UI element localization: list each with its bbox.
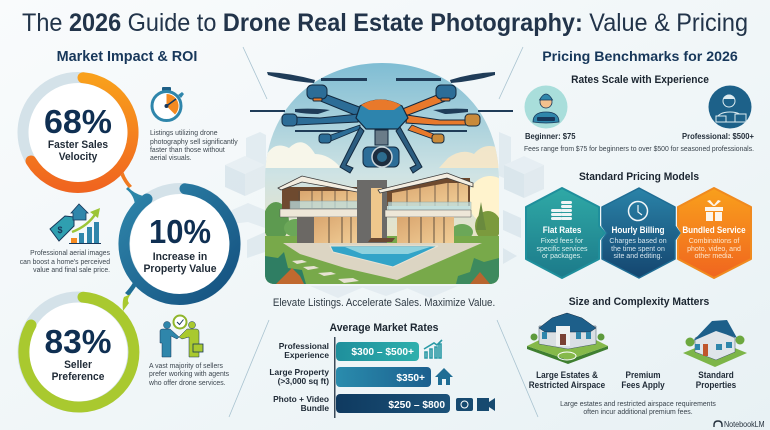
icon: professional pilot: [708, 86, 752, 128]
tagline: Elevate Listings. Accelerate Sales. Maximize Value.: [273, 298, 495, 309]
stat ring: 83 percent: [23, 297, 134, 407]
text: property value note: can boost a home's perceived: [20, 258, 110, 266]
subheading: size and complexity: Size and Complexity Matters: [569, 296, 709, 308]
scene: sky, house and pool: [265, 63, 499, 284]
bar: large property: (>3,000 sq ft): [278, 376, 329, 386]
landing legs: [340, 127, 364, 173]
icon: standard house: [683, 320, 747, 367]
bar: photo and video bundle: $250 – $800: [388, 400, 445, 411]
heading: pricing benchmarks: Pricing Benchmarks for 2026: [542, 49, 738, 65]
card: flat rates: or packages.: [542, 253, 582, 260]
text: property value note: Professional aerial images: [30, 249, 110, 257]
label: standard properties: Properties: [696, 380, 736, 390]
icon: price tag and growth chart: $: [57, 225, 63, 235]
badge: NotebookLM: NotebookLM: [724, 420, 765, 429]
icon: clock: [628, 202, 648, 220]
bar: large property: $350+: [396, 373, 425, 384]
camera: [375, 130, 388, 145]
icon: growth bars: [424, 340, 442, 358]
stepping stones: [292, 260, 359, 283]
label: premium fees: Premium: [626, 370, 661, 380]
card: flat rates: [526, 188, 605, 278]
stat ring: 83 percent: 83%: [44, 323, 112, 360]
bar: photo and video bundle: Bundle: [301, 403, 329, 413]
hero illustration: drone over modern house: [250, 60, 513, 309]
text: fee range: Fees range from $75 for beginners to over $500 for seasoned professionals.: [524, 144, 754, 153]
stat ring: 68 percent: 68%: [44, 103, 112, 140]
title: The 2026 Guide to Drone Real Estate Photography: Value & Pricing: [22, 9, 748, 37]
label: large estates: Restricted Airspace: [529, 380, 605, 390]
card: hourly billing: Charges based on: [609, 238, 667, 245]
icon: large estate: [527, 313, 608, 364]
back arms: [328, 125, 360, 141]
icon: camera: [456, 398, 473, 411]
card: bundled service: Bundled Service: [682, 225, 746, 235]
label: beginner price: Beginner: $75: [525, 132, 576, 141]
drone: [250, 72, 513, 173]
card: flat rates: specific services: [537, 246, 588, 253]
icon: video camera: [477, 398, 495, 411]
text: sales velocity note: photography sell significantly: [150, 138, 238, 146]
label: premium fees: Fees Apply: [621, 380, 665, 390]
connector: rings: [120, 171, 143, 311]
center tower: [357, 180, 387, 244]
icon: gift box: [705, 200, 723, 221]
stat ring: 68 percent: [23, 78, 133, 188]
body: [356, 100, 408, 129]
card: bundled service: [678, 188, 751, 278]
axis: [334, 337, 336, 418]
card: bundled service: photo, video, and: [687, 246, 741, 253]
bar: professional experience: [279, 341, 419, 361]
card: hourly billing: site and editing.: [613, 253, 663, 260]
rotors: [250, 72, 513, 132]
icon: stopwatch: [152, 87, 184, 120]
card: bundled service: Combinations of: [689, 238, 739, 245]
bar: photo and video bundle: [273, 394, 450, 413]
panel: pricing benchmarks: [524, 49, 765, 429]
stat ring: 10 percent: [124, 188, 236, 300]
stat ring: 83 percent: Preference: [52, 371, 105, 383]
bar: professional experience: Experience: [284, 350, 329, 360]
deck and pool: [283, 243, 482, 280]
left wing: [282, 187, 363, 209]
text: sales velocity note: faster than those without: [150, 146, 225, 154]
chart heading: Average Market Rates: [330, 322, 439, 334]
card: hourly billing: Hourly Billing: [611, 225, 665, 235]
decorative isometric city backdrop: [225, 132, 544, 298]
subheading: rates scale: Rates Scale with Experience: [571, 74, 709, 86]
right wing: [387, 178, 470, 206]
card: flat rates: Fixed fees for: [541, 238, 584, 245]
label: large estates: Large Estates &: [536, 370, 598, 380]
text: seller preference note: A vast majority of sellers: [149, 362, 223, 370]
text: property value note: value and final sale price.: [33, 266, 110, 274]
icon: coins: [551, 201, 572, 220]
icon: price tag and growth chart: [50, 204, 101, 244]
label: standard properties: Standard: [698, 370, 734, 380]
stat ring: 68 percent: Faster Sales: [48, 139, 108, 151]
icon: house: [435, 368, 453, 385]
bar: photo and video bundle: Photo + Video: [273, 394, 329, 404]
front arms: [318, 93, 362, 118]
bar: large property: Large Property: [269, 367, 329, 377]
bar: professional experience: $300 – $500+: [351, 347, 414, 358]
subheading: pricing models: Standard Pricing Models: [579, 171, 699, 183]
label: professional price: Professional: $500+: [682, 132, 754, 141]
motors: [282, 85, 480, 143]
chart: average market rates: [269, 322, 495, 418]
stat ring: 68 percent: Velocity: [59, 151, 97, 163]
card: hourly billing: the time spent on: [611, 246, 665, 253]
icon: handshake: [160, 316, 203, 357]
stat ring: 83 percent: Seller: [64, 359, 92, 371]
stat ring: 10 percent: 10%: [149, 213, 211, 250]
text: seller preference note: prefer working with agents: [149, 370, 230, 378]
card: hourly billing: [602, 188, 680, 278]
card: flat rates: Flat Rates: [543, 225, 582, 235]
bar: large property: [269, 367, 431, 387]
foliage: [265, 252, 306, 284]
heading: market impact: Market Impact & ROI: [57, 49, 197, 65]
icon: beginner pilot: [524, 86, 568, 128]
bar: professional experience: Professional: [279, 341, 329, 351]
text: sales velocity note: aerial visuals.: [150, 154, 192, 162]
text: sales velocity note: Listings utilizing drone: [150, 129, 218, 137]
stat ring: 10 percent: Increase in: [153, 251, 207, 263]
card: bundled service: other media.: [695, 253, 734, 260]
text: airspace note: often incur additional premium fees.: [583, 409, 693, 416]
text: seller preference note: who offer drone services.: [148, 379, 226, 387]
text: airspace note: Large estates and restricted airspace requirements: [560, 401, 716, 408]
panel: market impact and ROI: [20, 49, 238, 407]
stat ring: 10 percent: Property Value: [143, 263, 217, 275]
